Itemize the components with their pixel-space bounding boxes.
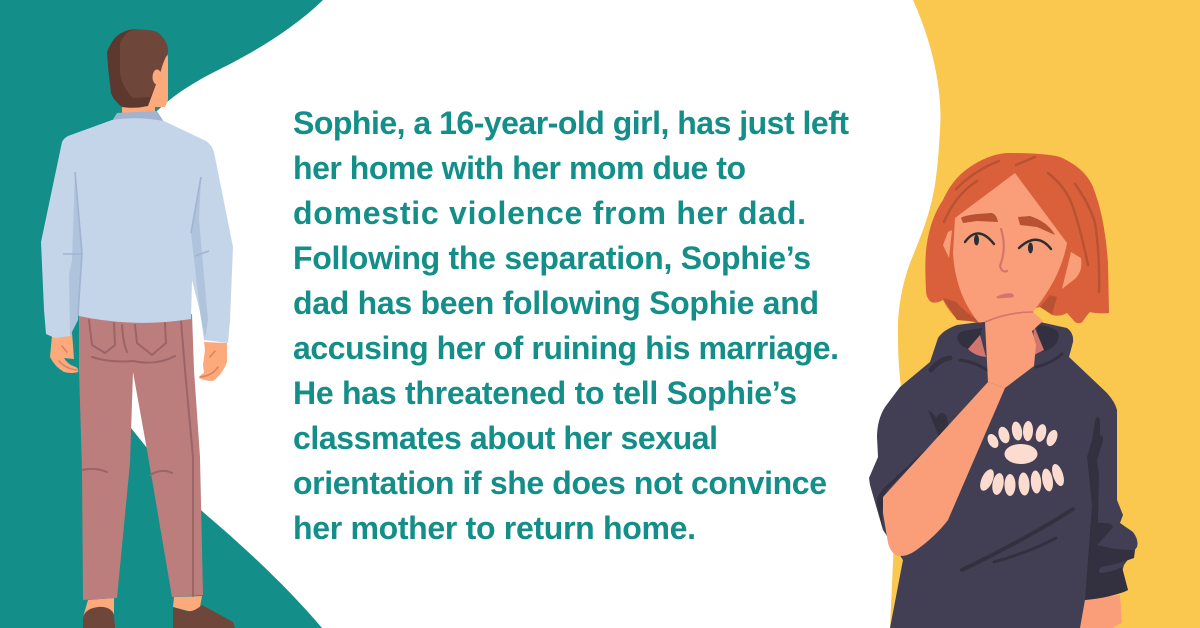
- girl: mouth: [997, 294, 1014, 298]
- man: shirt: [41, 118, 233, 343]
- story text block: classmates about her sexual: [293, 420, 718, 456]
- story text block: dad has been following Sophie and: [293, 285, 819, 321]
- man: right hand: [199, 342, 227, 381]
- story text block: accusing her of ruining his marriage.: [293, 330, 839, 366]
- girl: hand on chin: [985, 312, 1043, 388]
- story text block: Following the separation, Sophie’s: [293, 240, 811, 276]
- man: shirt shading: [69, 172, 208, 338]
- man: shoes: [83, 605, 235, 628]
- girl: pupils: [974, 234, 1033, 254]
- girl: hoodie eye print: [977, 421, 1066, 496]
- girl: eyebrows: [961, 213, 1055, 235]
- girl: hoodie shadows: [877, 325, 1135, 600]
- man: shirt collar: [112, 111, 164, 127]
- girl: second hand: [1080, 595, 1122, 628]
- story text block: [293, 105, 849, 546]
- background: yellow right shape: [890, 0, 1200, 628]
- girl: hoodie: [869, 322, 1138, 628]
- story text block: her home with her mom due to: [293, 150, 746, 186]
- man: trouser seams and pockets: [82, 320, 193, 596]
- thinking girl: [869, 153, 1138, 628]
- man: left hand: [50, 333, 78, 373]
- man: neck and face edge: [122, 55, 168, 118]
- story text block: orientation if she does not convince: [293, 465, 827, 501]
- girl: neck: [968, 326, 1044, 357]
- background: teal left shape: [0, 0, 323, 628]
- man: ankles: [83, 596, 202, 617]
- man: shirt creases: [63, 172, 209, 315]
- man seen from behind: [41, 29, 235, 628]
- girl: face: [953, 173, 1067, 322]
- girl: hair underside shadow: [943, 295, 1057, 322]
- man: hair: [107, 29, 168, 108]
- girl: hair: [925, 153, 1109, 323]
- man: left hand finger lines: [59, 346, 77, 370]
- girl: hoodie fold lines: [931, 354, 1073, 570]
- story text block: domestic violence from her dad.: [293, 195, 806, 231]
- girl: nose: [1000, 229, 1007, 271]
- story text block: her mother to return home.: [293, 510, 696, 546]
- man: trousers: [79, 312, 203, 600]
- girl: jaw line: [985, 312, 1033, 322]
- man: right hand finger lines: [200, 351, 218, 377]
- man: ear: [152, 70, 162, 84]
- girl: forearm: [883, 382, 1005, 556]
- girl: hair strands: [944, 157, 1099, 292]
- story text block: He has threatened to tell Sophie’s: [293, 375, 797, 411]
- girl: eyes: [965, 233, 1051, 249]
- girl: ears: [943, 230, 1081, 289]
- man: hair highlight: [120, 29, 168, 98]
- story text block: Sophie, a 16-year-old girl, has just left: [293, 105, 849, 141]
